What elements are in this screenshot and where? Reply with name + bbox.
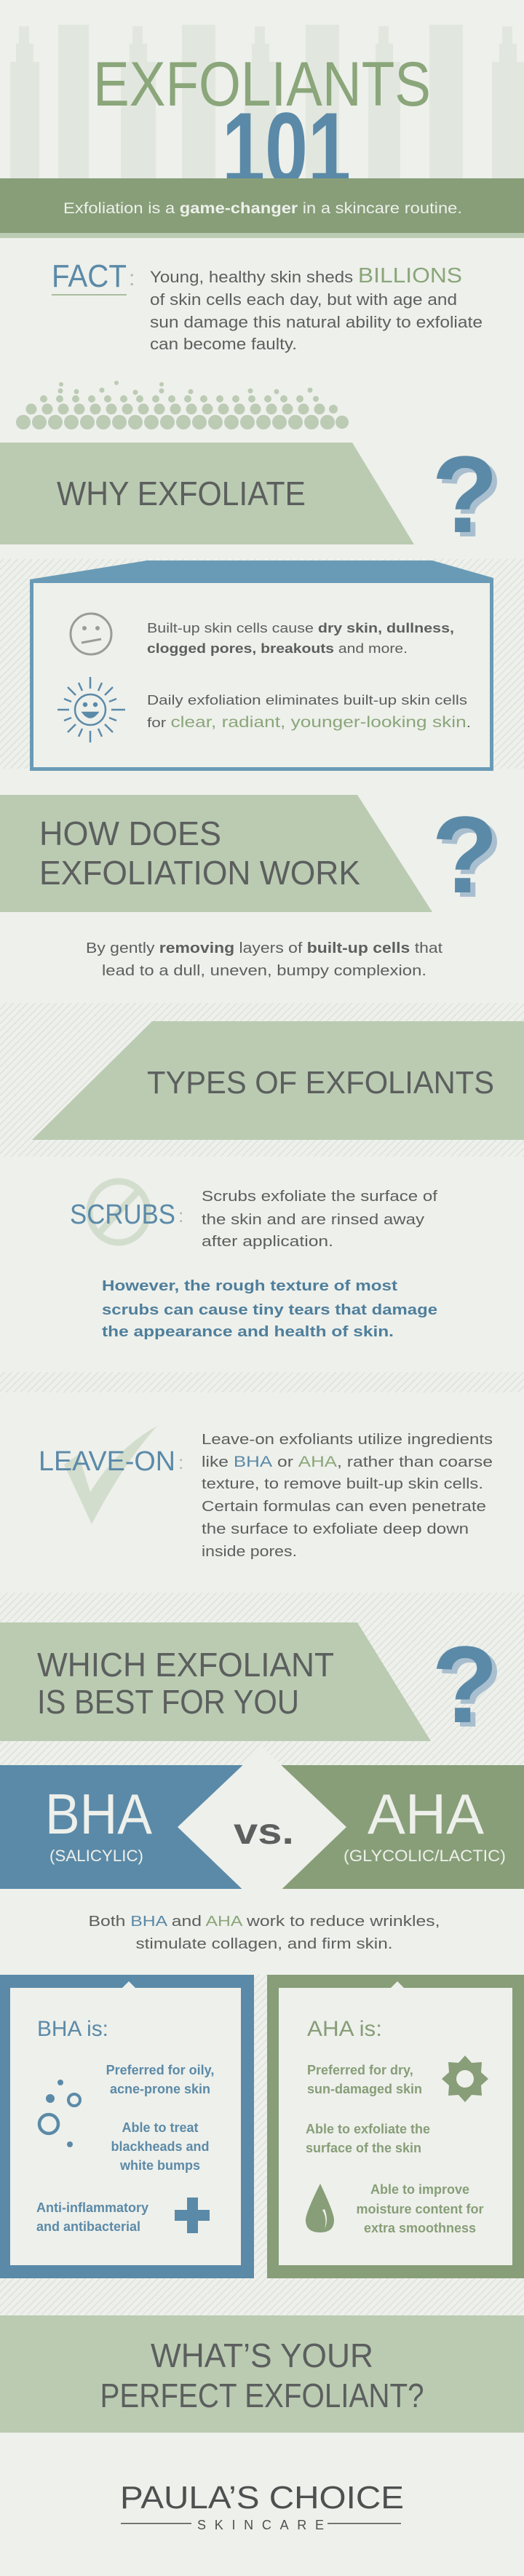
text: both work — [89, 1914, 440, 1952]
panel: bha box: and antibacterial — [36, 2219, 140, 2234]
title: 101 — [222, 91, 351, 205]
panel: bha vs aha: vs. — [234, 1811, 294, 1852]
footer band: perfect exfoliant: WHAT’S YOUR — [151, 2337, 373, 2374]
heading: types of exfoliants — [0, 1003, 524, 1157]
icon: question mark 2: ? — [432, 793, 499, 916]
icon: happy sun — [57, 677, 125, 742]
panel: bha box: Anti-inflammatory — [36, 2200, 148, 2215]
heading: which exfoliant: IS BEST FOR YOU — [37, 1683, 299, 1721]
tagline band — [0, 178, 524, 238]
text: benefit — [147, 693, 471, 731]
panel: aha box: extra smoothness — [364, 2221, 476, 2235]
panel: aha box: Preferred for dry, — [307, 2063, 413, 2077]
panel: scrubs: : — [178, 1205, 183, 1226]
text: both work: stimulate collagen, and firm skin. — [135, 1936, 393, 1952]
fact block: Young, healthy skin sheds BILLIONS — [150, 264, 462, 288]
title — [93, 49, 431, 205]
text: how it works: lead to a dull, uneven, bumpy complexion. — [102, 963, 426, 979]
panel: leave-on: like BHA or AHA , rather than coarse — [202, 1454, 493, 1470]
background: bottles — [10, 25, 524, 178]
text: problem: Built-up skin cells cause dry skin, dullness, — [147, 621, 454, 635]
panel: why exfoliate box — [0, 559, 524, 771]
panel: bha box: BHA is: — [37, 2017, 108, 2041]
panel: bha vs aha: (GLYCOLIC/LACTIC) — [344, 1847, 506, 1865]
logo: SKINCARE — [197, 2518, 324, 2532]
fact block: can become faulty. — [150, 335, 297, 353]
fact block: of skin cells each day, but with age and — [150, 290, 457, 309]
icon: question mark 1: ? — [437, 437, 504, 560]
panel: leave-on: inside pores. — [202, 1544, 297, 1560]
icon: check mark — [64, 1426, 157, 1524]
heading: types of exfoliants: TYPES OF EXFOLIANTS — [147, 1065, 494, 1101]
text: how it works: By gently removing layers of built-up cells that — [86, 940, 443, 956]
heading: how does exfoliation work: HOW DOES — [39, 815, 221, 852]
panel: leave-on: the surface to exfoliate deep down — [202, 1521, 469, 1537]
heading: how does exfoliation work — [0, 795, 432, 912]
panel: bha vs aha: (SALICYLIC) — [49, 1847, 143, 1865]
heading: which exfoliant: WHICH EXFOLIANT — [37, 1646, 334, 1684]
panel: scrubs: SCRUBS — [70, 1200, 175, 1230]
heading: which exfoliant — [0, 1593, 524, 1767]
icon: neutral face — [71, 614, 111, 654]
panel: bha box: Preferred for oily, — [106, 2063, 214, 2077]
icon: plus — [175, 2197, 210, 2233]
panel: bha vs aha: BHA — [45, 1782, 152, 1846]
panel: aha box: surface of the skin — [306, 2141, 421, 2155]
panel: bha vs aha: AHA — [368, 1782, 484, 1846]
panel: bha box — [0, 1975, 254, 2278]
icon: bubbles — [39, 2080, 80, 2147]
panel: scrubs: after application. — [202, 1234, 333, 1250]
panel: leave-on — [39, 1426, 493, 1560]
icon: question mark 1: ? — [432, 433, 499, 555]
panel: aha box: moisture content for — [356, 2202, 484, 2216]
panel: scrubs: Scrubs exfoliate the surface of — [202, 1189, 438, 1205]
logo: PAULA’S CHOICE — [120, 2480, 404, 2516]
icon: question mark 2: ? — [437, 798, 504, 920]
panel: aha box: Able to exfoliate the — [306, 2122, 430, 2136]
text: benefit: Daily exfoliation eliminates built-up skin cells — [147, 693, 467, 708]
panel: aha box: AHA is: — [307, 2017, 382, 2041]
text: benefit: for clear, radiant, younger-looking skin . — [147, 714, 471, 731]
text: problem: clogged pores, breakouts and more. — [147, 641, 408, 656]
panel: aha box — [267, 1975, 524, 2278]
footer band: perfect exfoliant — [0, 2315, 524, 2433]
heading: why exfoliate: WHY EXFOLIATE — [57, 475, 306, 512]
panel: bha box: Able to treat — [122, 2120, 199, 2135]
panel: leave-on: Certain formulas can even penetrate — [202, 1499, 486, 1515]
tagline band: Exfoliation is a game-changer in a skincare routine. — [63, 200, 462, 217]
fact block — [52, 258, 483, 353]
logo — [120, 2480, 404, 2532]
panel: aha box: sun-damaged skin — [307, 2082, 422, 2096]
heading: why exfoliate — [0, 443, 414, 544]
fact block: FACT — [52, 258, 127, 294]
footer band: perfect exfoliant: PERFECT EXFOLIANT? — [100, 2377, 424, 2414]
panel: bha box: blackheads and — [111, 2139, 210, 2154]
heading: how does exfoliation work: EXFOLIATION WORK — [39, 854, 360, 892]
panel: scrubs: the skin and are rinsed away — [202, 1212, 424, 1228]
decorative dots — [16, 381, 349, 429]
text: scrubs warning: the appearance and health of skin. — [102, 1324, 394, 1340]
panel: bha box: acne-prone skin — [110, 2082, 210, 2096]
text: scrubs warning: scrubs can cause tiny tears that damage — [102, 1302, 437, 1318]
icon: no sign — [90, 1181, 148, 1243]
text: how it works — [86, 940, 443, 979]
text: both work: Both BHA and AHA work to reduce wrinkles, — [89, 1914, 440, 1930]
icon: question mark 3: ? — [437, 1628, 504, 1750]
title: EXFOLIANTS — [93, 49, 431, 119]
icon: sun gear — [442, 2056, 488, 2102]
panel: leave-on: LEAVE-ON — [39, 1446, 175, 1477]
text: scrubs warning — [102, 1278, 437, 1340]
text: problem — [147, 621, 454, 656]
fact block: sun damage this natural ability to exfoliate — [150, 313, 483, 331]
panel: aha box: Able to improve — [370, 2182, 469, 2197]
panel: bha box: white bumps — [119, 2158, 200, 2173]
panel: scrubs — [70, 1181, 438, 1340]
panel: leave-on: : — [178, 1451, 183, 1473]
panel: leave-on: Leave-on exfoliants utilize ingredients — [202, 1432, 493, 1448]
icon: question mark 3: ? — [432, 1623, 499, 1745]
fact block: : — [129, 266, 135, 290]
icon: water drop — [306, 2184, 334, 2232]
panel: bha vs aha — [0, 1747, 524, 1900]
text: scrubs warning: However, the rough texture of most — [102, 1278, 397, 1294]
panel: leave-on: texture, to remove built-up skin cells. — [202, 1476, 483, 1492]
